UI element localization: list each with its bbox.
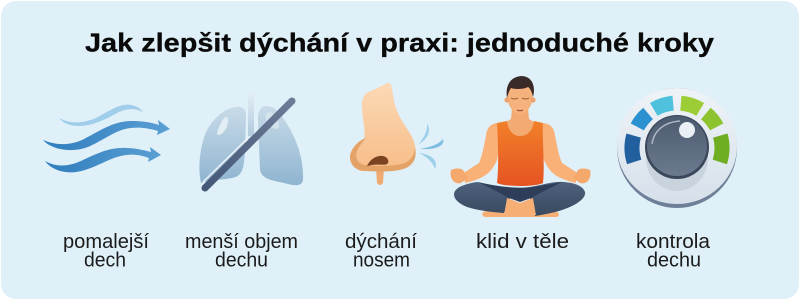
icon: wind arrows — [43, 105, 170, 172]
tank top — [497, 121, 544, 186]
icon: crossed-out lungs — [199, 93, 303, 188]
label: slower breathing — [63, 231, 149, 272]
knob — [645, 115, 709, 179]
label: smaller volume: dechu — [215, 250, 268, 272]
crotch shadow — [478, 182, 562, 202]
nose shape — [350, 83, 416, 171]
legs — [454, 182, 585, 216]
gauge segments — [632, 103, 722, 162]
knob shadow — [646, 125, 708, 191]
label: breath control — [636, 231, 711, 272]
trachea — [248, 93, 254, 143]
knob indicator — [679, 122, 695, 138]
head — [508, 80, 532, 114]
label: slower breathing: pomalejší — [63, 231, 149, 253]
dial face — [617, 88, 737, 204]
label: smaller volume: menší objem — [185, 231, 298, 253]
label: smaller volume — [185, 231, 298, 272]
face — [511, 98, 529, 111]
nostril — [367, 156, 388, 166]
title: Jak zlepšit dýchání v praxi: jednoduché kroky — [85, 28, 715, 58]
hair — [507, 76, 534, 98]
label: breath control: kontrola — [636, 231, 711, 253]
nostril wing shade — [350, 138, 416, 172]
label: calm body: klid v těle — [476, 231, 569, 253]
label: nose breathing: nosem — [353, 250, 410, 272]
hands — [451, 168, 468, 183]
lung highlights — [217, 117, 228, 135]
arms — [465, 123, 503, 183]
centre foot — [504, 198, 536, 215]
knob highlight arc — [652, 121, 680, 144]
label: nose breathing: dýchání — [345, 231, 417, 253]
nose stem — [376, 168, 384, 185]
slash — [205, 101, 292, 188]
feet — [482, 211, 559, 217]
label: breath control: dechu — [647, 250, 701, 272]
label: nose breathing — [345, 231, 417, 272]
right lung — [258, 106, 303, 185]
icon: meditating man — [451, 76, 590, 217]
dial rim shadow — [617, 88, 737, 208]
left lung — [199, 107, 246, 183]
air puffs — [419, 123, 443, 169]
icon: nose with airflow — [350, 83, 443, 185]
label: slower breathing: dech — [84, 250, 126, 272]
icon: breathing control dial — [617, 88, 737, 208]
neck and chest — [503, 108, 537, 137]
ears — [504, 97, 510, 103]
